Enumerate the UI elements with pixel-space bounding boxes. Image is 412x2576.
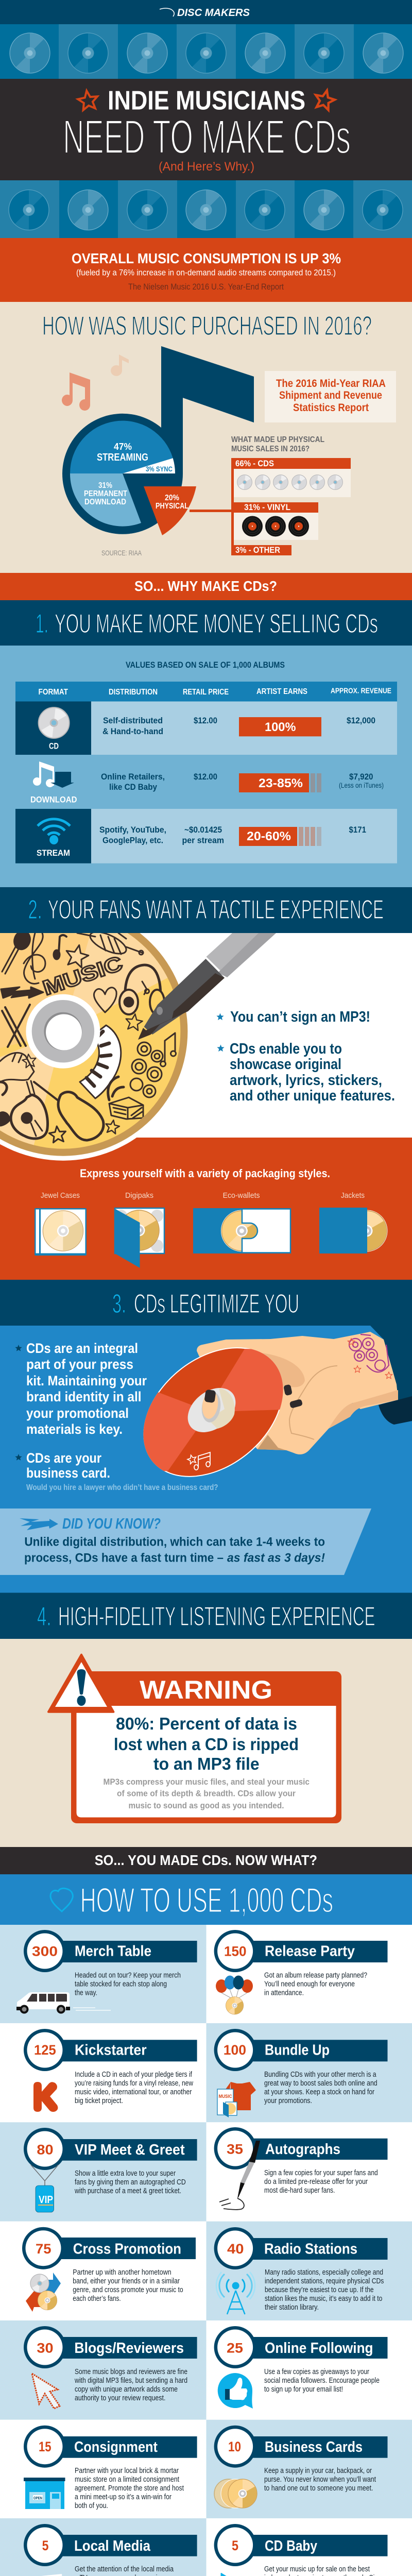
card: 35 autographs: most die-hard super fans.	[264, 2186, 335, 2195]
packaging: jacket: Jackets	[341, 1191, 365, 1200]
bullet list: tactile reasons: You can’t sign an MP3!	[230, 1009, 370, 1025]
table header: FORMAT	[38, 688, 68, 697]
table header: RETAIL PRICE	[183, 688, 229, 697]
consumption statistic banner: The Nielsen Music 2016 U.S. Year-End Report	[128, 282, 284, 292]
table row: download: $12.00	[194, 772, 217, 782]
top logo band	[0, 0, 412, 24]
card: 75 cross promotion: each other’s fans.	[73, 2294, 121, 2303]
heading 1: more money: 1.	[36, 609, 48, 639]
card: 25 online following: 25	[227, 2341, 243, 2356]
MUSIC lettering: MUSIC	[40, 952, 126, 1000]
chart: note-shaped pie: 20%	[165, 494, 179, 502]
icon: VIP lanyard	[31, 2165, 58, 2212]
card: 40 radio stations: Radio Stations	[264, 2241, 357, 2258]
table row: CD: $12,000	[347, 716, 375, 725]
card: 10 business cards: Keep a supply in your car, backpack, or	[264, 2466, 372, 2475]
chart: note-shaped pie: PHYSICAL	[156, 502, 188, 511]
icon: van	[16, 1992, 111, 2013]
card: 35 autographs: do a limited pre-release offer for your	[264, 2177, 368, 2186]
card: 75 cross promotion: band, either your friends or in a similar	[73, 2277, 180, 2285]
heading: physical breakdown: WHAT MADE UP PHYSICAL	[231, 435, 324, 444]
banner: now what: SO... YOU MADE CDs. NOW WHAT?	[95, 1852, 317, 1868]
icon: stacked CDs	[214, 2479, 257, 2508]
card: 80 VIP meet and greet: Show a little extra love to your super	[75, 2169, 176, 2178]
icon: CD exchange arrows	[26, 2273, 61, 2312]
card: 100 bundle up: Bundling CDs with your other merch is a	[264, 2070, 376, 2079]
panel: packaging styles	[35, 1167, 387, 1268]
banner: so why make CDs	[0, 573, 412, 600]
warning statement: lost when a CD is ripped	[114, 1735, 299, 1754]
chart: note-shaped pie: PERMANENT	[84, 489, 127, 498]
bullet list: tactile reasons	[216, 1009, 395, 1104]
icon: VIP lanyard: VIP	[39, 2194, 53, 2206]
table row: download: $7,920	[349, 772, 373, 782]
banner: now what	[0, 1847, 412, 1874]
icon: CD Baby triangles	[221, 2573, 249, 2576]
card: 15 consignment: 15	[39, 2439, 52, 2454]
heading 4: high fidelity: 4.	[37, 1602, 52, 1632]
card: 80 VIP meet and greet: 80	[37, 2142, 54, 2158]
table row: CD: 100%	[265, 720, 296, 734]
card: 35 autographs	[206, 2122, 412, 2222]
card: 5 CD Baby	[206, 2518, 412, 2576]
icon: double music note	[62, 372, 90, 411]
packaging: jewel case: Jewel Cases	[41, 1191, 80, 1200]
panel: packaging styles: Express yourself with a variety of packaging styles.	[80, 1167, 330, 1180]
card: 5 local media	[0, 2518, 206, 2576]
bullet: press kit	[15, 1341, 147, 1437]
icon: newspaper	[21, 2574, 64, 2576]
chart: note-shaped pie: 3% SYNC	[146, 465, 173, 473]
card: 35 autographs: Autographs	[265, 2141, 340, 2158]
bullet: business card: business card.	[26, 1465, 110, 1481]
warning explanation: MP3s compress your music files, and steal your music	[103, 1777, 310, 1787]
heading 3: legitimize: CDs LEGITIMIZE YOU	[134, 1289, 299, 1319]
banner: so why make CDs: SO... WHY MAKE CDs?	[134, 578, 277, 594]
card: 75 cross promotion: Cross Promotion	[73, 2241, 181, 2258]
packaging: eco-wallet: Eco-wallets	[223, 1191, 260, 1200]
packaging: digipak: Digipaks	[125, 1191, 153, 1200]
bullet: press kit: your promotional	[26, 1405, 129, 1421]
icon: balloons with CD	[216, 1975, 253, 2014]
card: 25 online following: Use a few copies as giveaways to your	[264, 2367, 369, 2376]
card: 5 local media: Get the attention of the local media	[75, 2565, 174, 2573]
icon: radio tower	[216, 2272, 255, 2314]
icon: small music note	[111, 354, 129, 376]
CD disc	[118, 1321, 308, 1503]
card: 75 cross promotion: genre, and cross promote your music to	[73, 2285, 183, 2294]
card: 10 business cards: 10	[228, 2439, 241, 2454]
table row: CD: CD	[49, 741, 59, 751]
warning explanation	[103, 1777, 310, 1810]
table row: stream: Spotify, YouTube,	[99, 825, 166, 835]
card: 25 online following: Online Following	[265, 2340, 373, 2357]
bullet: business card	[15, 1450, 218, 1492]
card: 40 radio stations: Many radio stations, especially college and	[265, 2268, 383, 2277]
heading 4: high fidelity	[0, 1593, 412, 1639]
icon: warning triangle	[48, 1655, 113, 1712]
callout: did you know	[0, 1509, 371, 1575]
CD pattern strip bottom	[0, 180, 412, 238]
card: 125 kickstarter: you’re raising funds for a vinyl release, new	[75, 2079, 193, 2088]
card: 30 blogs and reviewers: Some music blogs and reviewers are fine	[75, 2367, 187, 2376]
title block	[0, 79, 412, 180]
icon: record store: OPEN	[33, 2497, 42, 2500]
panel: how was music purchased	[0, 302, 412, 573]
card: 5 local media: Local Media	[74, 2538, 151, 2554]
table row: download: like CD Baby	[109, 782, 157, 792]
card: 100 bundle up: Bundle Up	[265, 2042, 330, 2059]
table row: download	[30, 761, 384, 805]
chart: note-shaped pie: DOWNLOAD	[84, 498, 126, 506]
heading: physical breakdown	[231, 435, 324, 453]
card: 300 merch table: Headed out on tour? Keep your merch	[75, 1971, 181, 1979]
card: 150 release party: Release Party	[265, 1943, 355, 1960]
chart: physical breakdown bars: 66% - CDS	[235, 459, 274, 468]
table row: download: Online Retailers,	[101, 772, 165, 782]
warning sign frame	[71, 1671, 341, 1823]
table row: stream: 20-60%	[247, 829, 291, 843]
card: 10 business cards	[206, 2420, 412, 2518]
card: 15 consignment: both of you.	[75, 2501, 108, 2510]
card: 25 online following: social media followers. Encourage people	[264, 2376, 380, 2385]
warning statement: to an MP3 file	[153, 1754, 260, 1773]
table row: CD	[15, 702, 397, 755]
card: 150 release party: in attendance.	[264, 1988, 304, 1997]
table header	[15, 682, 397, 702]
packaging: jewel case	[35, 1191, 87, 1256]
card: 80 VIP meet and greet	[0, 2122, 206, 2222]
heading 3: legitimize: 3.	[112, 1289, 126, 1319]
card: 300 merch table	[0, 1925, 206, 2023]
warning explanation: of some of its depth & breadth. CDs allow your	[117, 1789, 296, 1799]
card: 150 release party: Got an album release party planned?	[264, 1971, 367, 1979]
card: 40 radio stations	[206, 2222, 412, 2320]
consumption statistic banner: OVERALL MUSIC CONSUMPTION IS UP 3%	[72, 250, 341, 266]
packaging: digipak	[115, 1191, 164, 1268]
card: 15 consignment: Consignment	[74, 2439, 158, 2455]
heading: physical breakdown: MUSIC SALES IN 2016?	[231, 445, 310, 453]
callout: did you know: process, CDs have a fast turn time –	[24, 1551, 224, 1565]
panel: legitimize you	[0, 1321, 412, 1593]
card: 100 bundle up	[206, 2023, 412, 2122]
card: 300 merch table: Merch Table	[75, 1943, 151, 1960]
card: 30 blogs and reviewers: 30	[37, 2341, 54, 2356]
card: 300 merch table: the way.	[75, 1988, 97, 1997]
table row: stream: per stream	[182, 836, 224, 845]
card: 80 VIP meet and greet: with purchase of a meet & greet ticket.	[74, 2187, 181, 2195]
card: 5 CD Baby: CD Baby	[265, 2538, 317, 2554]
card: 10 business cards: to hand one out to someone you meet.	[264, 2484, 373, 2493]
card: 125 kickstarter: Include a CD in each of your pledge tiers if	[75, 2070, 193, 2079]
card: 40 radio stations: 40	[227, 2241, 244, 2257]
icon: thumbs up speech bubble	[218, 2373, 253, 2409]
packaging: eco-wallet	[193, 1191, 291, 1253]
warning statement: 80%: Percent of data is	[116, 1714, 297, 1733]
card: 15 consignment: Partner with your local brick & mortar	[75, 2466, 179, 2475]
card: 80 VIP meet and greet: VIP Meet & Greet	[75, 2142, 185, 2158]
table header: DISTRIBUTION	[109, 688, 158, 697]
card: 25 online following: to sign up for your email list!	[264, 2385, 343, 2394]
card: 300 merch table: table stocked for each stop along	[75, 1979, 167, 1988]
callout: did you know: Unlike digital distribution, which can take 1-4 weeks to	[24, 1535, 325, 1549]
heading 2: tactile experience: 2.	[28, 895, 42, 925]
icon: K logo	[33, 2082, 58, 2112]
packaging: jacket	[319, 1191, 387, 1253]
card: 125 kickstarter: 125	[34, 2042, 56, 2058]
table row: stream: GooglePlay, etc.	[102, 836, 163, 845]
callout: RIAA report: The 2016 Mid-Year RIAA	[276, 378, 386, 389]
warning statement	[114, 1714, 299, 1773]
bullet list: tactile reasons: and other unique features.	[230, 1088, 395, 1104]
panel: tactile experience background	[0, 933, 412, 1280]
icon: marker and scribble	[219, 2141, 260, 2210]
illustration: marker pen	[138, 933, 276, 1040]
callout: RIAA report: Shipment and Revenue	[279, 389, 382, 401]
bullet: business card: CDs are your	[26, 1450, 101, 1466]
card: 35 autographs: Sign a few copies for your super fans and	[264, 2168, 378, 2177]
tattoo	[349, 1334, 389, 1372]
table row: CD: & Hand-to-hand	[102, 726, 163, 736]
card: 30 blogs and reviewers: copy with unique artwork adds some	[75, 2385, 178, 2394]
card: 125 kickstarter	[0, 2023, 206, 2122]
callout: did you know: DID YOU KNOW?	[62, 1516, 161, 1532]
card: 15 consignment	[0, 2420, 206, 2518]
card: 100 bundle up: at your shows. Keep a stock on hand for	[264, 2088, 374, 2096]
CD logo mark	[186, 1452, 210, 1470]
table row: download: DOWNLOAD	[30, 794, 77, 805]
table row: stream: $171	[349, 825, 366, 835]
card: 125 kickstarter: music video, international tour, or another	[75, 2088, 192, 2096]
card: 10 business cards: Business Cards	[265, 2439, 363, 2455]
card: 30 blogs and reviewers	[0, 2320, 206, 2420]
chart: physical breakdown bars: 31% - VINYL	[244, 502, 290, 512]
table header: APPROX. REVENUE	[331, 686, 391, 696]
card: 30 blogs and reviewers: with digital MP3 files, but sending a hard	[74, 2376, 187, 2385]
heading 3: legitimize	[0, 1280, 412, 1326]
bullet: press kit: CDs are an integral	[26, 1341, 138, 1356]
source note: SOURCE: RIAA	[101, 549, 142, 557]
bullet list: tactile reasons: showcase original	[230, 1056, 341, 1073]
card: 40 radio stations: independent stations, require physical CDs	[265, 2277, 384, 2285]
illustration: hand holding CD	[143, 1326, 412, 1477]
callout: did you know: as fast as 3 days!	[227, 1551, 325, 1565]
chart: physical breakdown bars	[190, 458, 351, 555]
card: 300 merch table: 300	[32, 1944, 58, 1959]
consumption statistic banner	[0, 238, 412, 302]
table row: CD: $12.00	[194, 716, 217, 725]
card: 125 kickstarter: big ticket project.	[75, 2096, 123, 2105]
doodles	[0, 927, 176, 1143]
panel: warning	[0, 1639, 412, 1847]
card: 5 local media: 5	[42, 2538, 48, 2553]
bullet: press kit: part of your press	[26, 1357, 133, 1372]
card: 100 bundle up: 100	[224, 2042, 246, 2058]
icon: cursor arrow	[32, 2374, 60, 2409]
bullet: press kit: kit. Maintaining your	[26, 1373, 147, 1388]
bullet list: tactile reasons: artwork, lyrics, stickers,	[230, 1072, 382, 1089]
bullet list: tactile reasons: CDs enable you to	[230, 1041, 342, 1057]
table row: CD: Self-distributed	[103, 716, 163, 725]
card: 100 bundle up: your promotions.	[264, 2096, 312, 2105]
chart: note-shaped pie: STREAMING	[97, 452, 148, 463]
heading: how to use 1,000 CDs	[0, 1874, 412, 1925]
warning explanation: music to sound as good as you intended.	[129, 1801, 284, 1810]
card: 30 blogs and reviewers: authority to your review request.	[75, 2394, 165, 2402]
card: 125 kickstarter: Kickstarter	[75, 2042, 147, 2059]
card: 15 consignment: music store on a limited consignment	[75, 2475, 180, 2484]
top logo band: DISC MAKERS	[177, 7, 250, 19]
chart: note-shaped pie: 31%	[98, 481, 112, 490]
card: 5 CD Baby: 5	[232, 2538, 238, 2553]
heading 2: tactile experience	[0, 887, 412, 933]
chart: physical breakdown bars: 3% - OTHER	[235, 545, 280, 555]
card: 150 release party: You’ll need enough for everyone	[264, 1979, 355, 1988]
callout: RIAA report: Statistics Report	[293, 402, 369, 414]
table row: stream: STREAM	[37, 848, 70, 858]
table row: download: 23-85%	[259, 776, 303, 790]
icon: t-shirt and CD bundle	[217, 2082, 256, 2117]
bullet: press kit: materials is key.	[26, 1421, 123, 1437]
warning heading: WARNING	[140, 1675, 272, 1704]
card: 10 business cards: purse. You never know when you’ll want	[264, 2475, 376, 2484]
card: 40 radio stations: station likes the music, it’s easy to add it to	[265, 2294, 382, 2303]
warning body background	[76, 1706, 336, 1818]
card: 25 online following	[206, 2320, 412, 2420]
card: 75 cross promotion: 75	[36, 2241, 52, 2257]
heading 1: more money	[0, 600, 412, 646]
icon: t-shirt and CD bundle: MUSIC	[218, 2094, 232, 2099]
bullet: press kit: brand identity in all	[26, 1389, 141, 1404]
icon: record store	[24, 2478, 65, 2509]
card: 75 cross promotion	[0, 2222, 206, 2320]
card: 35 autographs: 35	[227, 2142, 243, 2157]
illustration: decorated CD with doodles	[0, 933, 187, 1161]
card: 75 cross promotion: Partner up with another hometown	[73, 2268, 171, 2277]
bullet: business card: Would you hire a lawyer who didn’t have a business card?	[26, 1483, 218, 1492]
CD pattern strip top	[0, 24, 412, 79]
panel: revenue table	[0, 646, 412, 887]
table row: stream: ~$0.01425	[184, 825, 222, 835]
chart: note-shaped pie: 47%	[114, 442, 132, 452]
card: 30 blogs and reviewers: Blogs/Reviewers	[74, 2340, 184, 2357]
card: 15 consignment: agreement. Promote the store and host	[75, 2484, 184, 2493]
card: 80 VIP meet and greet: fans by giving them an autographed CD	[75, 2178, 186, 2187]
card: 40 radio stations: because they’re easiest to cue up. If the	[265, 2285, 374, 2294]
callout: RIAA report	[265, 371, 396, 422]
card: 150 release party: 150	[224, 1944, 247, 1959]
table row: stream	[15, 809, 397, 863]
card: 150 release party	[206, 1925, 412, 2023]
card: 5 CD Baby: Get your music up for sale on the best	[264, 2565, 370, 2573]
card: 15 consignment: a mini meet-up so it’s a win-win for	[75, 2493, 171, 2501]
table caption: VALUES BASED ON SALE OF 1,000 ALBUMS	[126, 660, 285, 670]
table row: download: (Less on iTunes)	[339, 781, 384, 789]
card: 40 radio stations: their station library.	[265, 2303, 319, 2312]
title block: INDIE MUSICIANS	[108, 86, 305, 115]
consumption statistic banner: (fueled by a 76% increase in on-demand audio streams compared to 2015.)	[76, 268, 336, 277]
card: 100 bundle up: great way to boost sales both online and	[264, 2079, 377, 2088]
chart: note-shaped pie	[62, 346, 254, 535]
title block: (And Here’s Why.)	[159, 160, 254, 174]
table header: ARTIST EARNS	[256, 687, 307, 696]
